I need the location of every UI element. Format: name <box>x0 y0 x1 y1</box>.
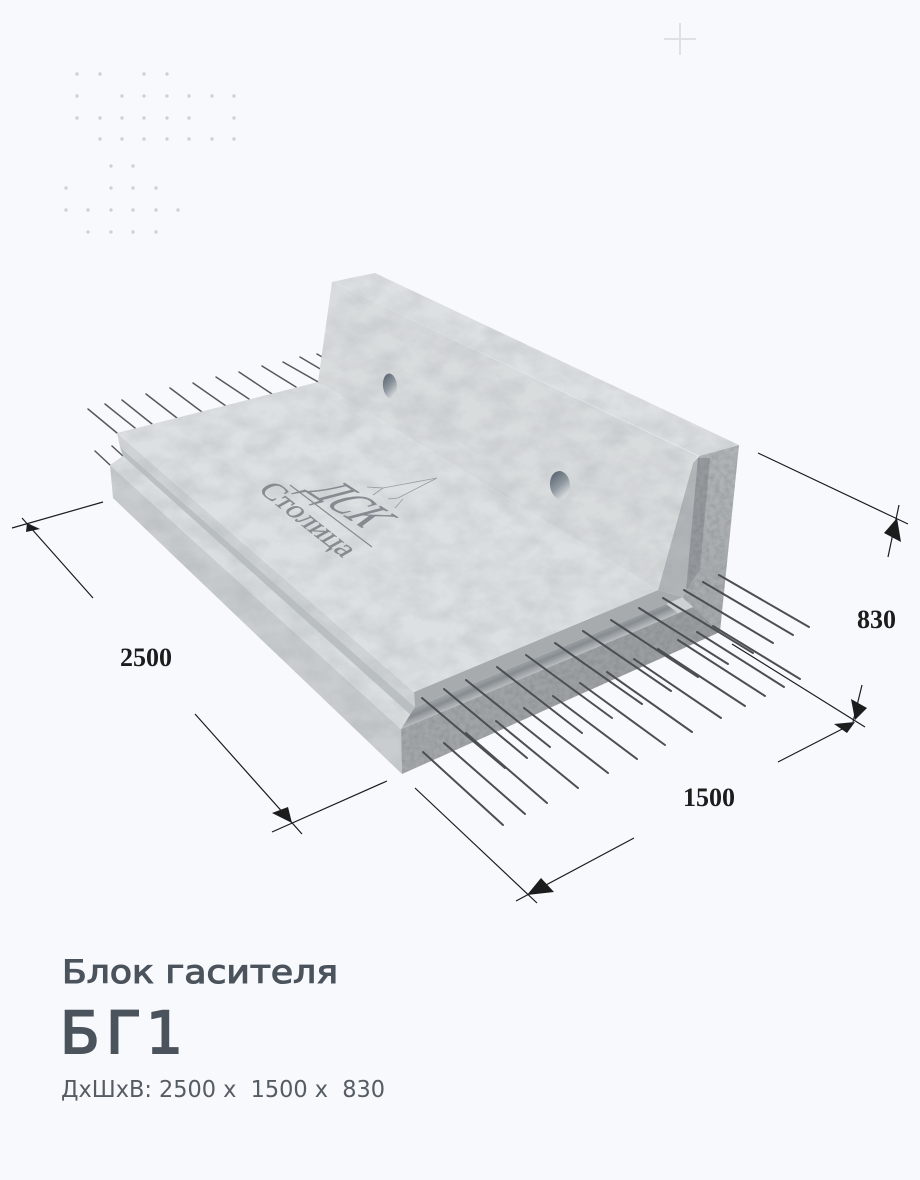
decorative dot grid: lower <box>64 164 180 234</box>
label: 830: 830 <box>857 605 896 634</box>
block: upper hole <box>382 373 398 399</box>
block: wall inner face <box>318 282 698 590</box>
rebar: lower row <box>423 626 800 825</box>
block: wall top <box>332 273 739 456</box>
concrete block <box>110 273 739 774</box>
logo: word two: Столица <box>251 477 367 562</box>
dimension: length 2500 <box>12 502 387 834</box>
heading: product code: БГ 1 <box>60 999 183 1067</box>
block: shadow under slab <box>120 447 415 716</box>
text: dimensions: ДхШхВ: 2500 x 1500 x 830 <box>61 1077 385 1103</box>
decorative dot grid: upper <box>75 72 236 141</box>
rebar: upper row <box>422 575 809 768</box>
block: groove end highlight <box>666 597 693 613</box>
logo: word one: ДСК <box>290 477 412 532</box>
logo imprint <box>251 477 437 562</box>
block: slab front face <box>414 590 683 707</box>
block: lower hole <box>549 470 571 500</box>
block: slab left side <box>117 433 415 707</box>
block: end strip <box>686 458 710 590</box>
dimension: width 1500 <box>415 722 855 903</box>
block: slanted buttress face <box>658 456 699 597</box>
block: end face <box>683 445 739 632</box>
rebar: rear rods <box>88 354 324 465</box>
logo: dividing line <box>290 485 372 547</box>
heading: product type: Блок гасителя <box>62 953 338 991</box>
rebar: front rods <box>422 575 809 825</box>
block: groove <box>401 597 693 729</box>
block: floor surface <box>117 382 658 692</box>
label: 2500: 2500 <box>120 643 172 672</box>
decorative plus sign <box>664 23 696 55</box>
block: base left side <box>110 465 402 774</box>
logo: spire <box>367 478 437 508</box>
label: 1500: 1500 <box>683 783 735 812</box>
dimension: height 830 <box>732 453 908 727</box>
block: base lower ledge <box>110 447 415 729</box>
block: front face <box>401 607 720 774</box>
